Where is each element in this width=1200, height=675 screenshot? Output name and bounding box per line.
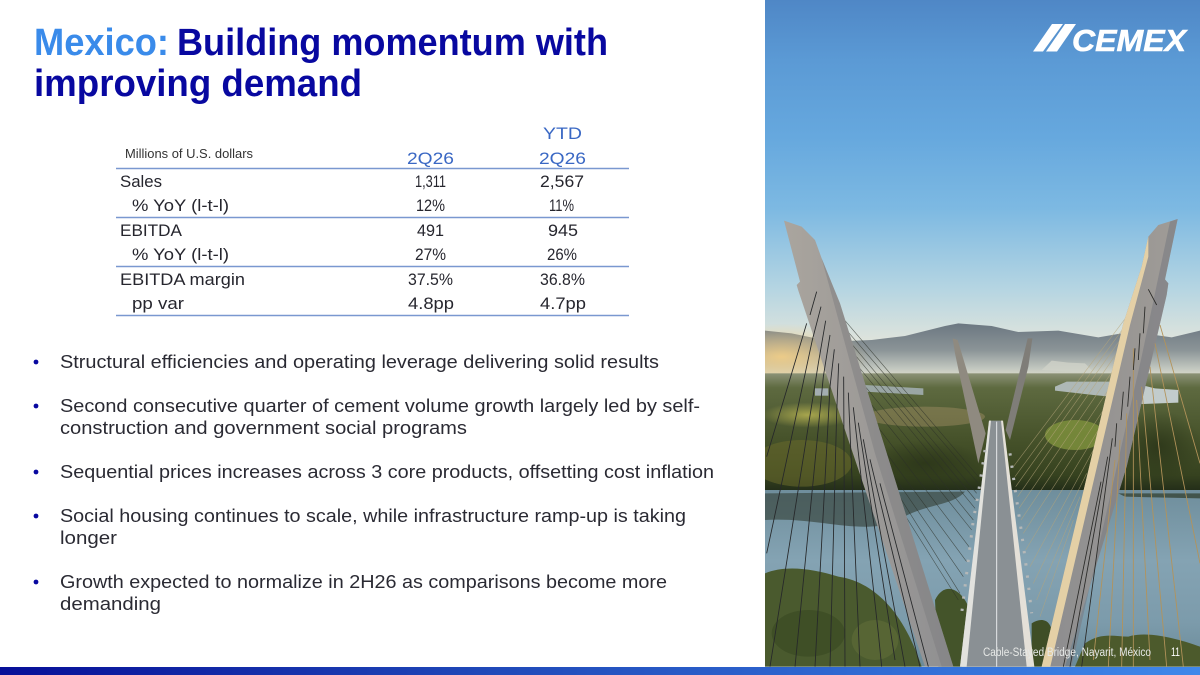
bullet text: Sequential prices increases across 3 core products, offsetting cost inflation	[60, 461, 714, 482]
bullet text: demanding	[60, 593, 161, 614]
right pylon	[1042, 219, 1178, 667]
bullet text: Structural efficiencies and operating leverage delivering solid results	[60, 351, 659, 372]
bullet list	[34, 351, 714, 614]
table rows: % YoY (l-t-l)	[132, 197, 229, 215]
table rows: 491	[417, 222, 444, 240]
title	[34, 22, 608, 105]
title: Mexico:	[34, 22, 169, 64]
table header: 2Q26	[407, 149, 454, 168]
table rows: 26%	[547, 246, 577, 264]
table header: YTD	[543, 124, 582, 143]
table rows: % YoY (l-t-l)	[132, 246, 229, 264]
bullet text	[60, 351, 714, 614]
table rows: EBITDA margin	[120, 271, 245, 289]
bullet markers	[34, 360, 38, 584]
table rows: 12%	[416, 197, 445, 215]
table rows: pp var	[132, 295, 185, 313]
table rules	[116, 168, 629, 316]
logo: CEMEX: CEMEX	[1072, 23, 1188, 58]
table header: Millions of U.S. dollars	[125, 147, 253, 161]
town skyline	[1042, 361, 1095, 373]
table rows: 2,567	[540, 173, 584, 191]
table rows: 945	[548, 222, 578, 240]
table header	[125, 124, 586, 168]
table rows: 11%	[549, 197, 574, 215]
mountains	[765, 323, 1200, 377]
photo: cable-stayed bridge	[765, 0, 1200, 667]
bullet text: Growth expected to normalize in 2H26 as comparisons become more	[60, 571, 667, 592]
front cables left	[767, 292, 928, 667]
photo caption: Cable-Stayed Bridge, Nayarit, México	[983, 647, 1151, 659]
bullet text: Social housing continues to scale, while infrastructure ramp-up is taking	[60, 505, 686, 526]
table rows	[120, 173, 586, 313]
title: improving demand	[34, 63, 362, 105]
page number: 11	[1171, 645, 1180, 659]
table header: 2Q26	[539, 149, 586, 168]
table rows: 4.8pp	[408, 295, 454, 313]
water	[765, 490, 1200, 667]
buildings	[1055, 382, 1110, 397]
table rows: 27%	[415, 246, 446, 264]
title: Building momentum with	[177, 22, 608, 64]
bullet text: construction and government social programs	[60, 417, 467, 438]
far pylons	[953, 338, 986, 463]
bullet text: longer	[60, 527, 117, 548]
back cable fans	[842, 317, 978, 600]
table rows: 37.5%	[408, 271, 453, 289]
table rows: Sales	[120, 173, 162, 191]
table rows: 36.8%	[540, 271, 585, 289]
foreground trees	[765, 569, 922, 667]
table rows: 1,311	[415, 173, 446, 191]
bridge deck	[960, 421, 1033, 667]
table rows: EBITDA	[120, 222, 182, 240]
footer bar	[0, 667, 1200, 675]
left pylon	[784, 221, 953, 667]
financial table	[116, 124, 629, 316]
table rows: 4.7pp	[540, 295, 586, 313]
front cables right	[1093, 325, 1200, 667]
land	[765, 373, 1200, 493]
bullet text: Second consecutive quarter of cement volume growth largely led by self-	[60, 395, 700, 416]
